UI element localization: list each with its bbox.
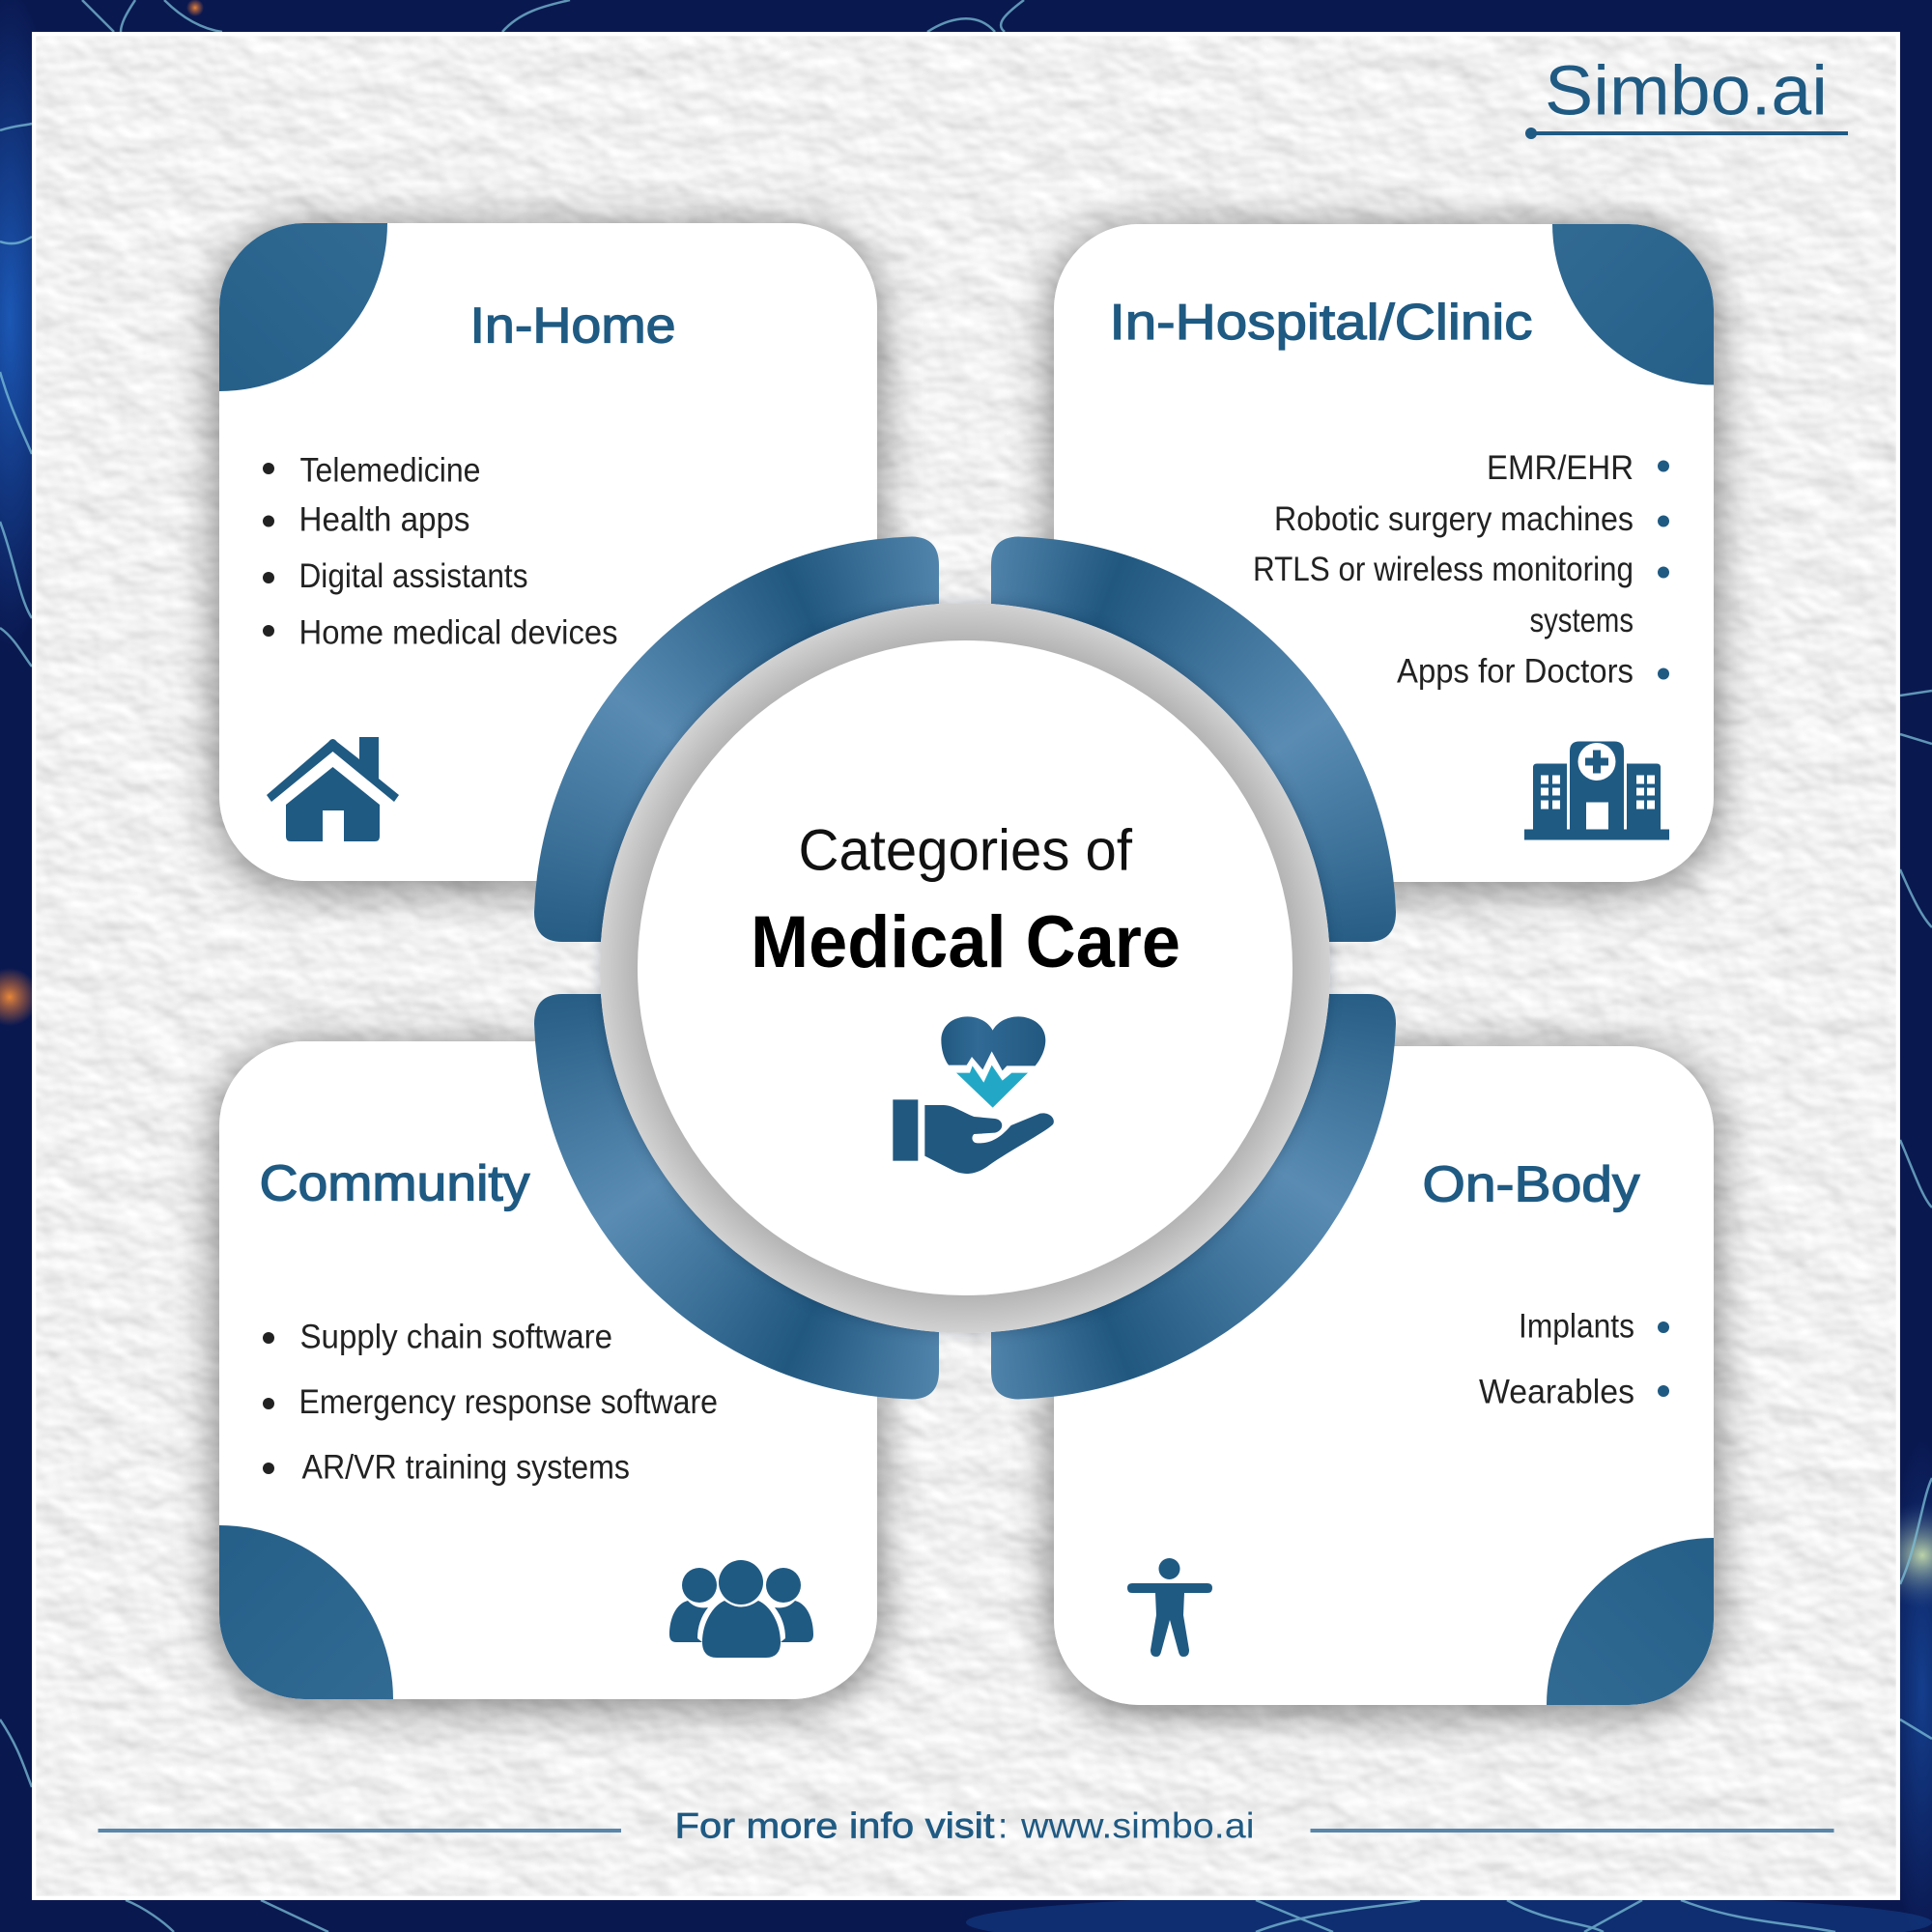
- centre title: Categories of: [798, 817, 1132, 883]
- panel: In-Home: [219, 223, 877, 881]
- footer: For more info visit: [674, 1806, 995, 1845]
- footer: :: [998, 1806, 1008, 1845]
- bullet list: Health apps: [299, 500, 469, 539]
- centre circle: [638, 640, 1293, 1295]
- heading: Community: [259, 1155, 529, 1211]
- bullet list: Emergency response software: [299, 1383, 718, 1421]
- heading: In-Home: [469, 298, 676, 354]
- bullet list: Implants: [1519, 1308, 1634, 1345]
- centre title: [751, 817, 1180, 983]
- heading: In-Hospital/Clinic: [1109, 294, 1532, 350]
- heading: On-Body: [1422, 1157, 1640, 1213]
- bullet list: [263, 1318, 718, 1486]
- grey ring: [600, 603, 1330, 1333]
- panel: On-Body: [1054, 1046, 1714, 1705]
- centre title: Medical Care: [751, 901, 1180, 983]
- icon: hospital: [1524, 741, 1669, 839]
- bullet list: EMR/EHR: [1487, 448, 1634, 487]
- bullet list: Telemedicine: [299, 452, 481, 489]
- ring segment: top left: [533, 536, 939, 942]
- corner accent: [1552, 62, 1875, 384]
- bullet list: systems: [1530, 601, 1634, 639]
- bullet list: Apps for Doctors: [1397, 652, 1634, 690]
- bullet list: Home medical devices: [299, 614, 618, 651]
- icon: house: [267, 737, 399, 841]
- corner accent: [45, 1525, 393, 1873]
- bullet list: RTLS or wireless monitoring: [1253, 551, 1634, 587]
- bullet list: Wearables: [1479, 1374, 1634, 1410]
- icon: person: [1127, 1558, 1212, 1657]
- bullet list: [1253, 448, 1669, 690]
- footer: [99, 1806, 1833, 1845]
- ring segment: bottom left: [533, 994, 939, 1400]
- bullet list: Digital assistants: [299, 557, 527, 595]
- corner accent: [51, 55, 387, 391]
- footer: www.simbo.ai: [1020, 1806, 1254, 1845]
- bullet list: Supply chain software: [299, 1318, 612, 1356]
- logo: Simbo.ai: Simbo.ai: [1545, 52, 1828, 129]
- panel: Community: [219, 1041, 877, 1699]
- bullet list: [263, 452, 618, 651]
- icon: heart in hand: [893, 1016, 1054, 1174]
- bullet list: AR/VR training systems: [301, 1449, 630, 1486]
- bullet list: Robotic surgery machines: [1274, 500, 1634, 537]
- corner accent: [1547, 1538, 1881, 1872]
- ring segment: bottom right: [991, 994, 1397, 1400]
- icon: people: [669, 1560, 813, 1658]
- panel: In-Hospital/Clinic: [1054, 224, 1714, 881]
- ring segment: top right: [991, 536, 1397, 942]
- bullet list: [1479, 1308, 1669, 1410]
